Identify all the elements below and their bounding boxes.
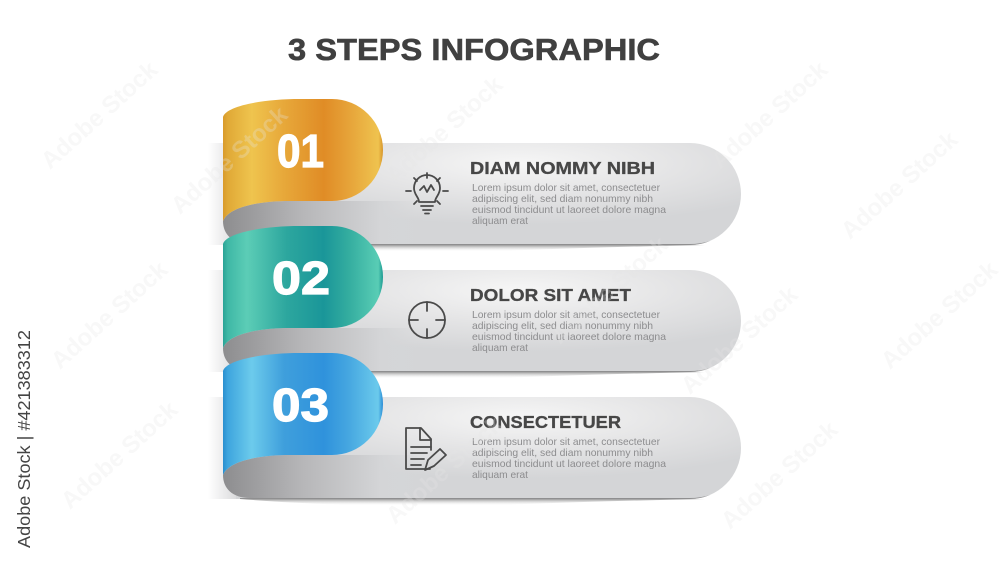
tab: step 2 xyxy=(223,226,383,348)
text block: step 2: Lorem ipsum dolor sit amet, consectetuer xyxy=(472,309,660,321)
watermarks: Adobe Stock xyxy=(706,56,834,174)
watermarks: Adobe Stock xyxy=(716,416,844,534)
tab: step 1 xyxy=(223,99,383,221)
text block: step 3: aliquam erat xyxy=(472,469,528,481)
watermarks: Adobe Stock xyxy=(46,256,174,374)
text block: step 3: Lorem ipsum dolor sit amet, consectetuer xyxy=(472,436,660,448)
watermarks: Adobe Stock xyxy=(676,281,804,399)
watermarks: Adobe Stock xyxy=(381,411,509,529)
stock id side label: Adobe Stock | #421383312 xyxy=(14,330,34,548)
watermarks: Adobe Stock xyxy=(546,231,674,349)
watermarks: Adobe Stock xyxy=(381,71,509,189)
ribbon curl: step 2 xyxy=(223,328,420,371)
text block: step 3 xyxy=(470,412,666,481)
text block: step 3: CONSECTETUER xyxy=(470,412,621,432)
icon: document and pen xyxy=(406,428,446,470)
text block: step 2: euismod tincidunt ut laoreet dolore magna xyxy=(472,331,666,343)
icon: target xyxy=(409,302,445,338)
text block: step 1: euismod tincidunt ut laoreet dolore magna xyxy=(472,204,666,216)
watermarks: Adobe Stock xyxy=(876,256,1000,374)
tab: step 3 xyxy=(223,353,383,475)
watermarks: Adobe Stock xyxy=(36,56,164,174)
panel: step 2 bar xyxy=(208,270,741,379)
panel: step 3 bar xyxy=(208,397,741,506)
watermarks: Adobe Stock xyxy=(166,101,294,219)
text block: step 1: Lorem ipsum dolor sit amet, consectetuer xyxy=(472,182,660,194)
ribbon curl: step 3 xyxy=(223,455,420,498)
number 01: 01 xyxy=(277,125,324,177)
text block: step 3: euismod tincidunt ut laoreet dolore magna xyxy=(472,458,666,470)
text block: step 2: DOLOR SIT AMET xyxy=(470,285,631,305)
ribbon curl: step 1 xyxy=(223,201,420,244)
text block: step 1: aliquam erat xyxy=(472,215,528,227)
text block: step 2: aliquam erat xyxy=(472,342,528,354)
text block: step 3: adipiscing elit, sed diam nonummy nibh xyxy=(472,447,653,459)
watermarks: Adobe Stock xyxy=(836,126,964,244)
watermarks: Adobe Stock xyxy=(56,396,184,514)
text block: step 2 xyxy=(470,285,666,354)
text block: step 1 xyxy=(470,158,666,227)
number 03: 03 xyxy=(272,379,329,431)
text block: step 2: adipiscing elit, sed diam nonummy nibh xyxy=(472,320,653,332)
panel: step 1 bar xyxy=(208,143,741,252)
title: 3 STEPS INFOGRAPHIC xyxy=(288,32,660,67)
text block: step 1: adipiscing elit, sed diam nonummy nibh xyxy=(472,193,653,205)
icon: light bulb xyxy=(406,173,448,214)
text block: step 1: DIAM NOMMY NIBH xyxy=(470,158,655,178)
number 02: 02 xyxy=(272,252,330,304)
